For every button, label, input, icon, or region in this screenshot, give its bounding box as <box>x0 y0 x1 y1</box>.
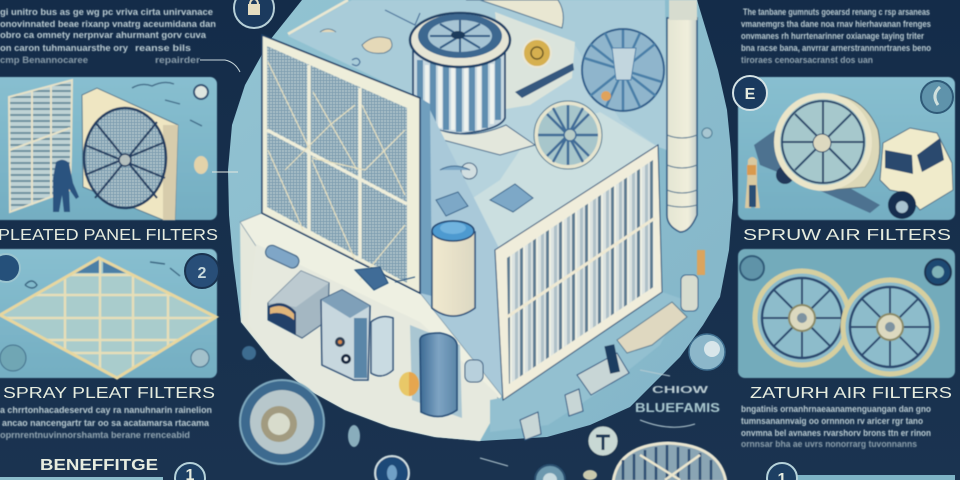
heading: return air filters: ZATURH AIR FILTERS <box>750 385 952 402</box>
cream wheel <box>536 103 600 167</box>
left top text block: on caron tuhmanuarsthe ory <box>0 43 128 53</box>
left top text block: reanse bils <box>135 43 191 53</box>
left top text block: obro ca omnety nerpnvar ahurmant gorv cuva <box>0 30 207 40</box>
connector line <box>212 171 238 173</box>
left top text block <box>0 7 216 65</box>
connector line <box>200 60 240 72</box>
wheel filter <box>777 96 869 188</box>
vent filter <box>495 145 662 400</box>
small cream cylinder <box>432 221 475 316</box>
heading: spray pleat filters: SPRAY PLEAT FILTERS <box>3 385 215 402</box>
badge: panel left <box>0 254 20 282</box>
left top text block: gi unitro bus as ge wg pc vriva cirta unirvanace <box>0 7 213 17</box>
worker <box>745 157 760 208</box>
left top text block: repairder <box>155 55 201 65</box>
truck cab <box>880 128 953 210</box>
badge: number 2 <box>185 254 219 288</box>
big pleated filter <box>262 35 420 293</box>
right bottom text block: bngatinis ornanhrnaeaanamenguangan dan gno <box>741 404 931 414</box>
central disc <box>228 0 733 441</box>
bottom strip right <box>795 475 955 480</box>
badge: right ball <box>921 81 953 113</box>
left bottom text block <box>0 405 212 440</box>
heading: spruw air filters: SPRUW AIR FILTERS <box>743 227 951 244</box>
top duct <box>466 0 563 28</box>
heading: pleated panel filters: PLEATED PANEL FILTERS <box>0 227 218 244</box>
right top text block: onvmanes rh hurrtenarinner oxianage taying triter <box>741 31 924 41</box>
bottom strip left <box>0 477 163 480</box>
lower components <box>264 243 483 417</box>
left top text block: cmp Benannocaree <box>0 55 88 65</box>
blue alcove <box>410 325 462 418</box>
left top text block: onovinnated beae rixanp vnatrg aceumidana dan <box>0 19 216 29</box>
badge: lock <box>234 0 274 28</box>
badge: bottom right number <box>767 463 797 480</box>
cylinder filter <box>413 45 505 134</box>
badge: number 2: 2 <box>198 265 207 282</box>
truck bed <box>754 130 880 213</box>
panel: pleated panel filters <box>0 77 217 220</box>
worker <box>53 160 79 212</box>
twin wheel right <box>843 280 937 374</box>
frame with fan <box>82 88 178 220</box>
right bottom text block: ornnsar bha ae uvrs nonorrarg tuvonnanns <box>741 439 917 449</box>
caption: centre bottom: CHIOW <box>652 385 709 396</box>
panel: spray air filters <box>738 77 955 220</box>
arched fan bottom <box>613 443 726 480</box>
vertical duct <box>667 18 697 232</box>
blue coil <box>431 170 445 184</box>
scribbles on housing <box>320 29 392 53</box>
pleated door <box>9 80 72 212</box>
wheel filter barrel <box>805 94 880 190</box>
small doodles <box>132 82 202 126</box>
badge: bottom left number <box>175 463 205 480</box>
right top text block <box>741 7 931 65</box>
right top text block: tiroraes cenoarsacranst dos uan <box>741 55 873 65</box>
small icons bottom <box>242 346 695 480</box>
panel: return air filters <box>738 249 955 378</box>
right side tube <box>681 275 698 311</box>
badge: E <box>733 76 767 110</box>
upper housing <box>288 0 667 250</box>
filter base plate <box>423 122 535 155</box>
caption: centre bottom <box>635 385 720 415</box>
left bottom text block: ancao nancengartr tar oo sa acatamarsa rtacama <box>2 418 210 428</box>
truck wheel <box>888 191 916 219</box>
tray items <box>520 353 629 440</box>
diamond filter <box>0 258 216 378</box>
HVAC unit illustration <box>240 0 712 441</box>
right bottom text block: onvmna bel avnanes rvarshorv brons ttn er rinon <box>741 428 931 438</box>
heading: benefits: BENEFFITGE <box>40 457 158 474</box>
gold coin <box>523 39 551 67</box>
doodles <box>0 345 26 371</box>
badge: E: E <box>745 86 756 103</box>
right bottom text block: tumnsanannvaig oo ornnnon rv aricer rgr tano <box>741 416 923 426</box>
left bottom text block: oprnrentnuvinnorshamta berane rrenceabid <box>0 430 190 440</box>
twin wheel left <box>755 271 849 365</box>
duct clip <box>702 128 712 138</box>
label strip <box>515 63 574 98</box>
orange tip <box>601 91 611 101</box>
caption: centre bottom: BLUEFAMIS <box>635 400 720 415</box>
right top text block: vmanemgrs tha dane noa rnav hierhavanan frenges <box>741 19 931 29</box>
bottom curved tray <box>490 292 685 432</box>
blue side components <box>436 166 533 216</box>
lower shelf <box>240 222 503 441</box>
big blue fan <box>582 29 664 111</box>
right bottom text block <box>741 404 931 449</box>
round filter disc bottom left <box>240 380 324 464</box>
right top text block: bna racse bana, anvrrar arnerstrannnnrtranes beno <box>741 43 931 53</box>
left bottom text block: a chrrtonhacadeservd cay ra nanuhnarin rainelion <box>0 405 212 415</box>
glass ball <box>689 334 725 370</box>
panel: spray pleat filters <box>0 249 217 378</box>
small badges <box>740 256 764 280</box>
